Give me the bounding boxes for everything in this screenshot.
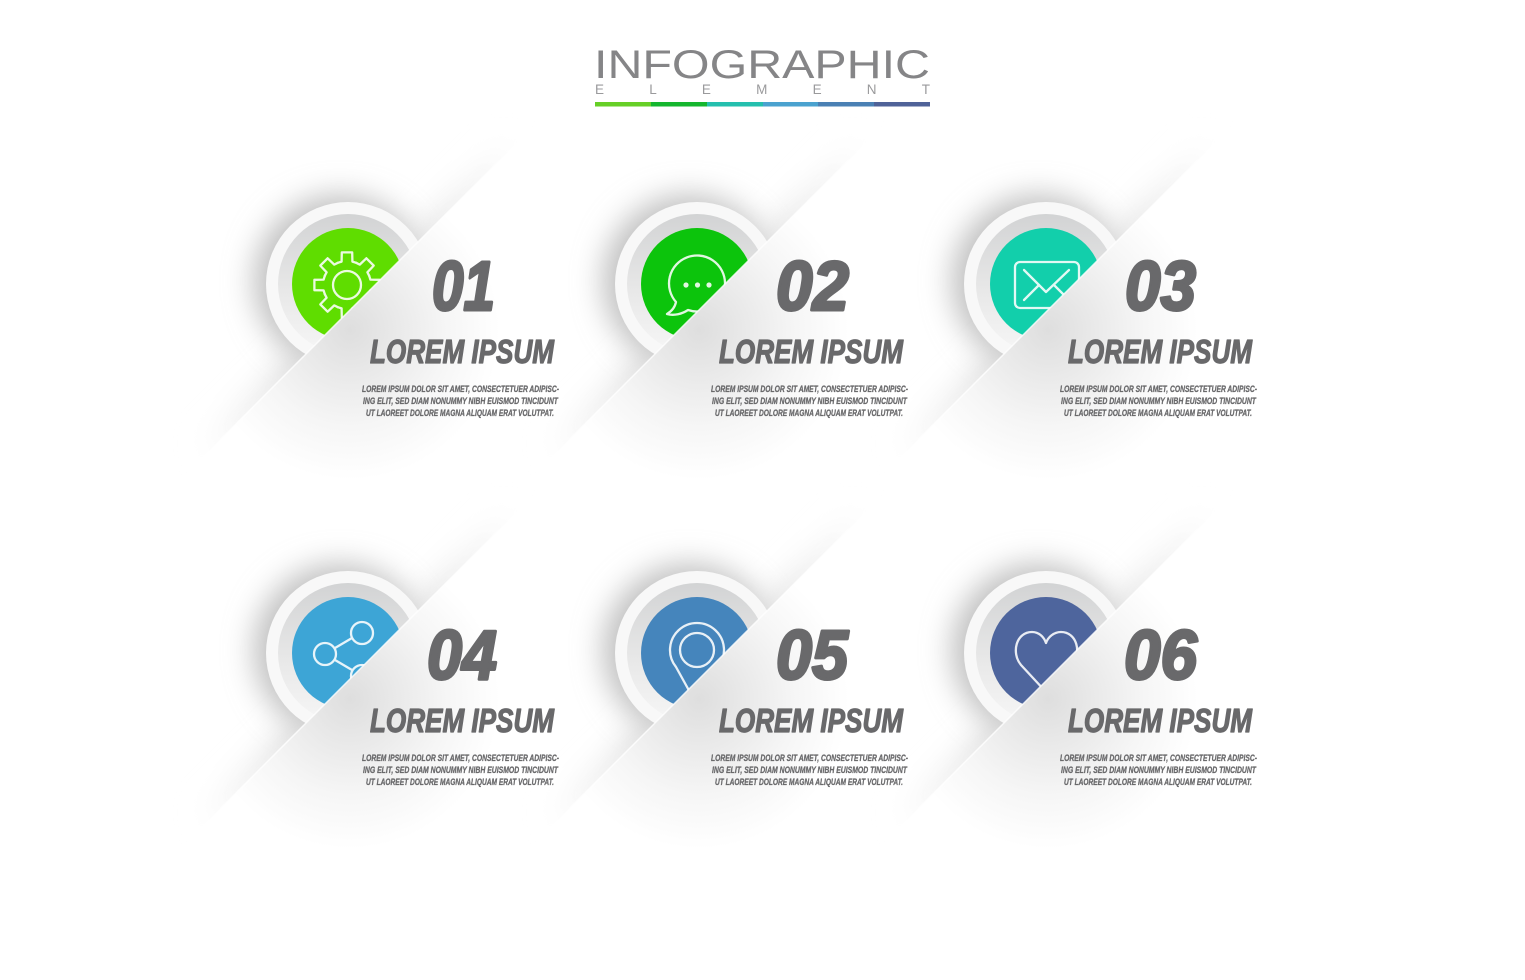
number 02: 02	[776, 247, 849, 325]
icon: map pin	[670, 623, 724, 705]
icon: chat bubble	[667, 255, 725, 315]
panel: step 05	[529, 509, 924, 849]
heading: LOREM IPSUM	[370, 702, 555, 739]
body text	[362, 753, 559, 788]
body text: LOREM IPSUM DOLOR SIT AMET, CONSECTETUER ADIPISC-	[362, 384, 559, 395]
icon: gear	[314, 252, 380, 318]
icon: share	[314, 622, 373, 687]
body text: UT LAOREET DOLORE MAGNA ALIQUAM ERAT VOLUTPAT.	[715, 777, 903, 788]
number 06: 06	[1124, 616, 1198, 694]
heading: LOREM IPSUM	[370, 333, 555, 370]
heading: LOREM IPSUM	[1068, 333, 1253, 370]
body text: LOREM IPSUM DOLOR SIT AMET, CONSECTETUER ADIPISC-	[711, 384, 908, 395]
body text	[711, 753, 908, 788]
body text	[1060, 753, 1257, 788]
panel: step 06	[878, 509, 1273, 849]
body text: ING ELIT, SED DIAM NONUMMY NIBH EUISMOD TINCIDUNT	[712, 396, 908, 407]
body text: ING ELIT, SED DIAM NONUMMY NIBH EUISMOD TINCIDUNT	[1061, 765, 1257, 776]
body text: LOREM IPSUM DOLOR SIT AMET, CONSECTETUER ADIPISC-	[711, 753, 908, 764]
body text: LOREM IPSUM DOLOR SIT AMET, CONSECTETUER ADIPISC-	[1060, 384, 1257, 395]
body text	[362, 384, 559, 419]
body text	[1060, 384, 1257, 419]
icon: heart	[1016, 632, 1077, 692]
body text: LOREM IPSUM DOLOR SIT AMET, CONSECTETUER ADIPISC-	[362, 753, 559, 764]
panel: step 03	[878, 140, 1273, 480]
body text: UT LAOREET DOLORE MAGNA ALIQUAM ERAT VOLUTPAT.	[366, 408, 554, 419]
body text	[711, 384, 908, 419]
body text: ING ELIT, SED DIAM NONUMMY NIBH EUISMOD TINCIDUNT	[363, 396, 559, 407]
number 05: 05	[776, 616, 849, 694]
body text: ING ELIT, SED DIAM NONUMMY NIBH EUISMOD TINCIDUNT	[712, 765, 908, 776]
panel: step 04	[180, 509, 575, 849]
body text: ING ELIT, SED DIAM NONUMMY NIBH EUISMOD TINCIDUNT	[363, 765, 559, 776]
number 04: 04	[427, 616, 497, 694]
title	[594, 43, 930, 106]
body text: UT LAOREET DOLORE MAGNA ALIQUAM ERAT VOLUTPAT.	[1064, 408, 1252, 419]
body text: UT LAOREET DOLORE MAGNA ALIQUAM ERAT VOLUTPAT.	[366, 777, 554, 788]
icon: envelope	[1015, 262, 1079, 308]
heading: LOREM IPSUM	[1068, 702, 1253, 739]
panel: step 02	[529, 140, 924, 480]
body text: ING ELIT, SED DIAM NONUMMY NIBH EUISMOD TINCIDUNT	[1061, 396, 1257, 407]
number 01: 01	[432, 247, 495, 325]
subtitle: element: ELEMENT	[595, 82, 930, 97]
body text: UT LAOREET DOLORE MAGNA ALIQUAM ERAT VOLUTPAT.	[715, 408, 903, 419]
body text: LOREM IPSUM DOLOR SIT AMET, CONSECTETUER ADIPISC-	[1060, 753, 1257, 764]
title: infographic: INFOGRAPHIC	[594, 43, 930, 87]
number 03: 03	[1125, 247, 1196, 325]
title colour bar	[595, 102, 930, 106]
body text: UT LAOREET DOLORE MAGNA ALIQUAM ERAT VOLUTPAT.	[1064, 777, 1252, 788]
heading: LOREM IPSUM	[719, 702, 904, 739]
heading: LOREM IPSUM	[719, 333, 904, 370]
panel: step 01	[180, 140, 575, 480]
